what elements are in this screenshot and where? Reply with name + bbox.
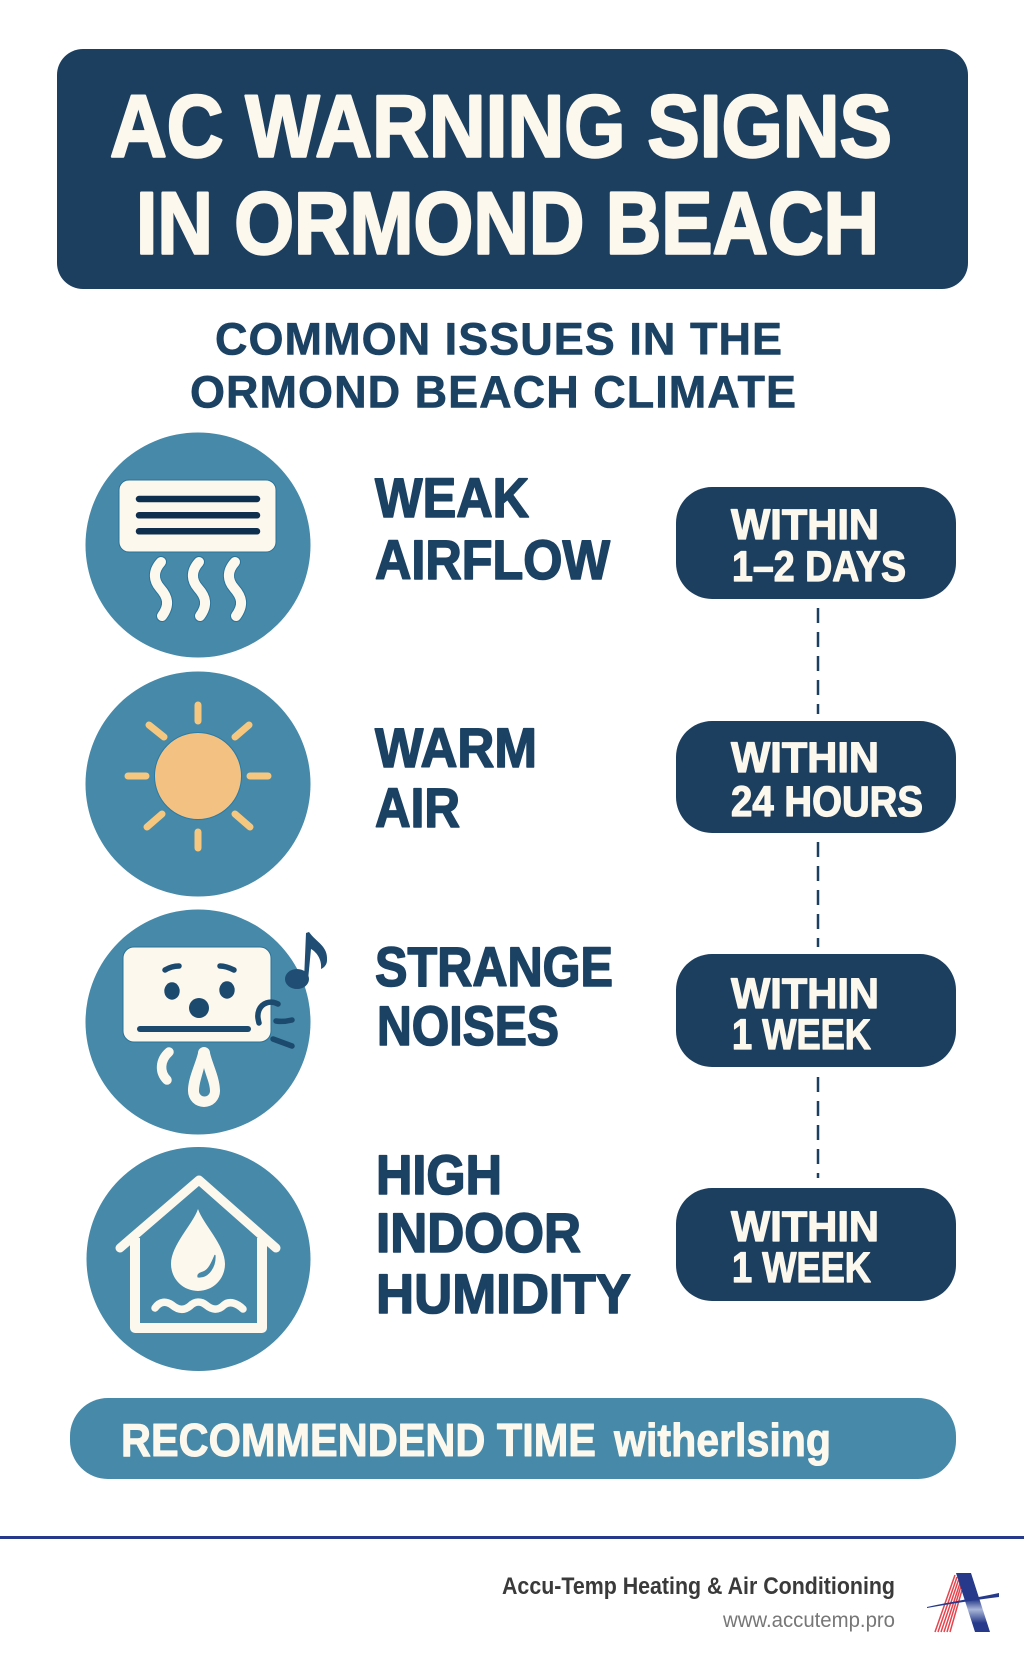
timeline pill: within 1-2 days: [676, 487, 956, 599]
recommended time bar: [70, 1398, 956, 1479]
recommended time bar: RECOMMENDEND TIME: [121, 1414, 596, 1466]
label: high indoor humidity: HUMIDITY: [376, 1262, 631, 1325]
icon: company logo: [927, 1573, 999, 1632]
timeline pill: within 1 week: WITHIN: [731, 971, 879, 1018]
icon: warm air sun: [86, 672, 310, 896]
dashed connector 1: [817, 608, 819, 714]
footer divider: [0, 1536, 1024, 1539]
timeline pill: within 24 hours: WITHIN: [731, 735, 879, 782]
label: weak airflow: WEAK: [375, 466, 529, 529]
label: warm air: WARM: [375, 716, 537, 779]
icon: music note: [285, 932, 327, 989]
label: high indoor humidity: [376, 1143, 631, 1325]
timeline pill: within 1 week: [676, 1188, 956, 1301]
label: strange noises: [375, 935, 613, 1057]
timeline pill: within 1-2 days: WITHIN: [731, 502, 879, 549]
icon: house humidity: [86, 1147, 310, 1371]
label: warm air: [375, 716, 537, 839]
subtitle: COMMON ISSUES IN THE: [215, 314, 782, 364]
timeline pill: within 1 week: 1 WEEK: [732, 1012, 871, 1059]
title line 1: AC WARNING SIGNS: [110, 76, 892, 176]
label: warm air: AIR: [375, 776, 460, 839]
dashed connector 3: [817, 1077, 819, 1178]
icon: weak airflow: [86, 432, 310, 658]
label: weak airflow: AIRFLOW: [375, 528, 610, 591]
label: high indoor humidity: HIGH: [376, 1143, 502, 1206]
subtitle: ORMOND BEACH CLIMATE: [190, 366, 796, 418]
timeline pill: within 1 week: WITHIN: [731, 1204, 879, 1251]
dashed connector 2: [817, 842, 819, 947]
label: weak airflow: [375, 466, 610, 591]
title banner: [57, 49, 968, 289]
timeline pill: within 1-2 days: 1–2 DAYS: [732, 544, 906, 591]
footer company name: Accu-Temp Heating & Air Conditioning: [502, 1573, 895, 1600]
title line 2: IN ORMOND BEACH: [136, 174, 879, 272]
timeline pill: within 1 week: 1 WEEK: [732, 1245, 871, 1292]
label: strange noises: NOISES: [377, 994, 559, 1057]
icon: strange noises: [86, 910, 327, 1134]
label: strange noises: STRANGE: [375, 935, 613, 998]
subtitle: [190, 314, 796, 418]
label: high indoor humidity: INDOOR: [376, 1201, 581, 1264]
timeline pill: within 24 hours: 24 HOURS: [731, 779, 923, 826]
footer website: www.accutemp.pro: [722, 1609, 895, 1632]
recommended time bar: witherlsing: [613, 1414, 831, 1466]
timeline pill: within 24 hours: [676, 721, 956, 833]
timeline pill: within 1 week: [676, 954, 956, 1067]
